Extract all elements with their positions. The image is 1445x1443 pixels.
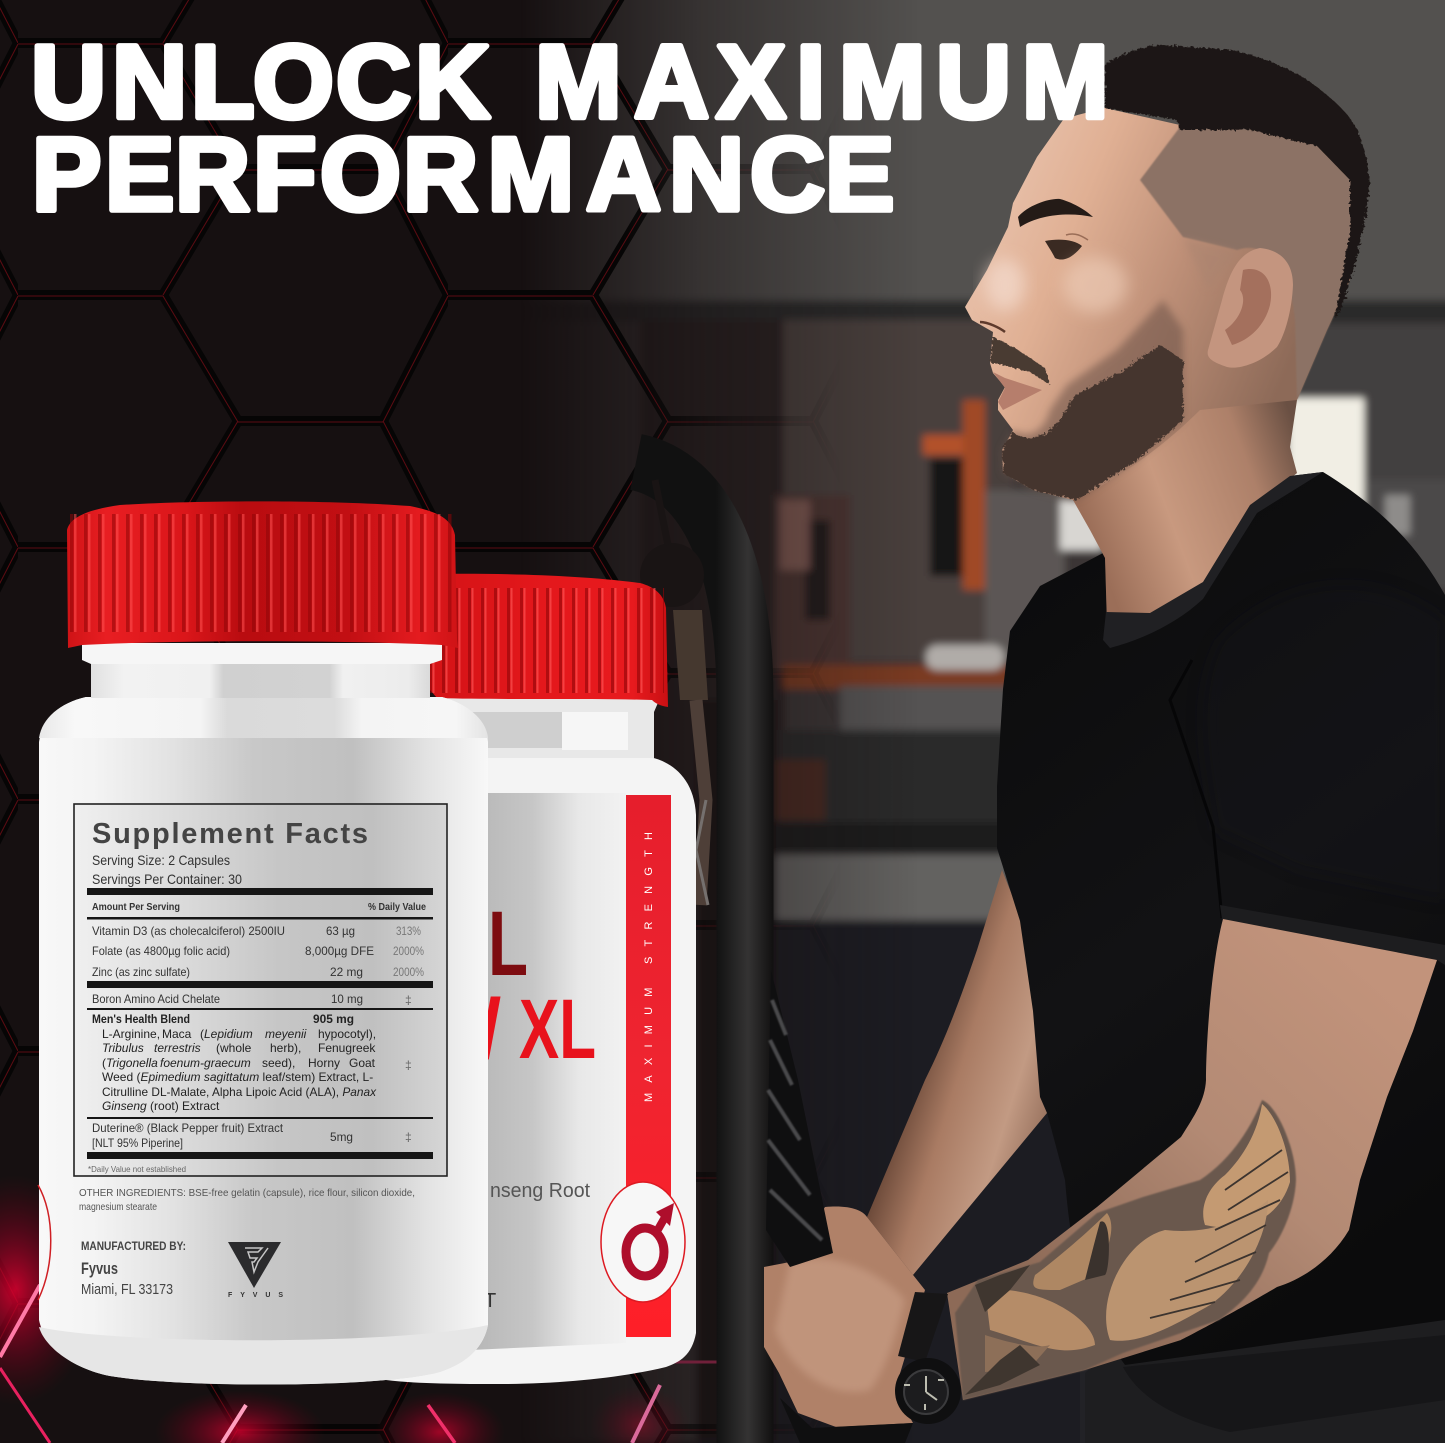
duterine row: ‡ [405, 1130, 412, 1144]
manufacturer [81, 1239, 186, 1298]
beard soft edge [1002, 300, 1183, 500]
manufacturer: Miami, FL 33173 [81, 1282, 173, 1298]
front bottle body [39, 697, 488, 1385]
mens health blend: Tribulus [102, 1041, 144, 1055]
hair [1105, 45, 1369, 318]
neck [1073, 340, 1297, 625]
neck collar [82, 643, 442, 664]
hexagon lines [0, 0, 900, 1443]
nutrient rows: 2000% [393, 944, 424, 958]
shaved fade [1140, 127, 1358, 400]
nutrient rows: Folate (as 4800µg folic acid) [92, 944, 230, 958]
cheek highlight [1063, 257, 1127, 313]
rear bottle body [380, 757, 696, 1384]
supplement facts panel [74, 804, 447, 1176]
neck [91, 660, 430, 698]
title: UNLOCK MAXIMUM [31, 24, 1109, 140]
mens health blend: terrestris [154, 1041, 201, 1055]
icon: male symbol circle [601, 1182, 685, 1302]
manufacturer: Fyvus [81, 1259, 118, 1278]
bottle shoulder [39, 697, 488, 738]
nutrient rows: Vitamin D3 (as cholecalciferol) 2500IU [92, 924, 285, 938]
mens health blend: Goat [349, 1056, 376, 1070]
duterine row: 5mg [330, 1130, 353, 1144]
far forearm [867, 870, 1047, 1275]
shirt shoulder sheen [1202, 585, 1445, 900]
duterine row [92, 1121, 412, 1150]
nutrient rows: 22 mg [330, 965, 363, 979]
front bottle cap [67, 501, 458, 648]
mens health blend: Maca [162, 1027, 192, 1041]
eyebrow [1018, 199, 1093, 227]
pants [1085, 1300, 1445, 1443]
mens health blend: Epimedium sagittatum leaf/stem) Extract, L- [140, 1070, 373, 1084]
collar [1103, 472, 1323, 648]
mens health blend: ‡ [405, 1058, 412, 1072]
nutrient rows: 63 µg [326, 924, 355, 938]
other ingredients: magnesium stearate [79, 1201, 157, 1213]
eye [1045, 240, 1082, 260]
waistband [1123, 1335, 1445, 1432]
man [764, 45, 1445, 1443]
red name fragment [478, 982, 596, 1076]
moustache [990, 337, 1050, 385]
title [31, 24, 1109, 233]
table header: % Daily Value [368, 902, 426, 913]
beard [1002, 345, 1183, 500]
other ingredients: OTHER INGREDIENTS: BSE-free gelatin (capsule), rice flour, silicon dioxide, [79, 1187, 415, 1199]
red arc of hidden label [38, 1185, 51, 1300]
nutrient rows [92, 924, 424, 1007]
near upper arm and forearm [947, 919, 1437, 1400]
battle rope arc and anchor [636, 462, 745, 1443]
table header [92, 902, 426, 913]
nostril [980, 322, 1005, 332]
icon: Fyvus logo [228, 1242, 283, 1299]
mens health blend: Citrulline DL-Malate, Alpha Lipoic Acid (ALA), Panax [102, 1085, 377, 1099]
rear bottle cap [430, 574, 668, 707]
lips [993, 372, 1042, 410]
front bottle [38, 501, 488, 1385]
count fragment: T [484, 1290, 496, 1312]
mens health blend: Trigonella [106, 1056, 158, 1070]
nutrient rows: 2000% [393, 965, 424, 979]
mens health blend: Lepidium [204, 1027, 253, 1041]
rear bottle neck [430, 698, 660, 758]
nose highlight [985, 259, 1025, 311]
serving info: Serving Size: 2 Capsules [92, 852, 230, 868]
mens health blend: 905 mg [313, 1012, 354, 1026]
nutrient rows: 8,000µg DFE [305, 944, 374, 958]
mens health blend: (whole [216, 1041, 252, 1055]
wristwatch [895, 1292, 961, 1424]
duterine row: [NLT 95% Piperine] [92, 1136, 183, 1150]
mens health blend: meyenii [265, 1027, 307, 1041]
gym photo background [520, 0, 1445, 1443]
red name fragment: XL [519, 982, 596, 1076]
serving info [92, 852, 242, 887]
vertical text: MAXIMUM STRENGTH [643, 832, 655, 1102]
manufacturer: MANUFACTURED BY: [81, 1239, 186, 1253]
mens health blend: Horny [308, 1056, 340, 1070]
mens health blend: L-Arginine, [102, 1027, 160, 1041]
nutrient rows: ‡ [405, 993, 412, 1007]
serving info: Servings Per Container: 30 [92, 871, 242, 887]
mens health blend: Weed ( [102, 1070, 140, 1084]
mens health blend: ( [102, 1056, 106, 1070]
shirt armpit seam [1170, 660, 1222, 918]
nutrient rows: Boron Amino Acid Chelate [92, 992, 220, 1006]
mens health blend: Men's Health Blend [92, 1012, 190, 1026]
ingredient fragment: nseng Root [490, 1180, 590, 1202]
head [965, 108, 1350, 500]
mens health blend: ( [200, 1027, 204, 1041]
rear bottle label stripe [626, 795, 671, 1337]
mens health blend: foenum-graecum [160, 1056, 251, 1070]
table rules [87, 888, 433, 1159]
title: PERFORMANCE [32, 117, 894, 233]
bottle base band [39, 1325, 488, 1385]
rope in hand [766, 970, 833, 1267]
nutrient rows: Zinc (as zinc sulfate) [92, 965, 190, 979]
hand gripping rope [764, 1207, 925, 1427]
mens health blend: Fenugreek [318, 1041, 376, 1055]
sleeve hem [1220, 905, 1445, 965]
footnote: *Daily Value not established [88, 1164, 186, 1174]
neon glow at bottom left [0, 1175, 720, 1443]
icon: Fyvus logo: FYVUS [228, 1292, 283, 1299]
mens health blend: seed), [262, 1056, 295, 1070]
rope grip base [780, 1398, 913, 1443]
black t-shirt [997, 472, 1445, 1365]
red name fragment: / [478, 982, 501, 1076]
nutrient rows: 10 mg [331, 992, 363, 1006]
nutrient rows: 313% [396, 924, 421, 938]
other ingredients [79, 1187, 415, 1213]
ear [1208, 248, 1293, 368]
duterine row: Duterine® (Black Pepper fruit) Extract [92, 1121, 284, 1135]
mens health blend [92, 1012, 412, 1113]
panel heading: Supplement Facts [92, 818, 368, 850]
mens health blend: Ginseng (root) Extract [102, 1099, 220, 1113]
tattoo: wing [955, 1100, 1296, 1400]
mens health blend: hypocotyl), [318, 1027, 376, 1041]
table header: Amount Per Serving [92, 902, 180, 913]
mens health blend: herb), [270, 1041, 301, 1055]
rear bottle product name fragments: L [488, 893, 528, 995]
rear bottle [380, 574, 696, 1384]
